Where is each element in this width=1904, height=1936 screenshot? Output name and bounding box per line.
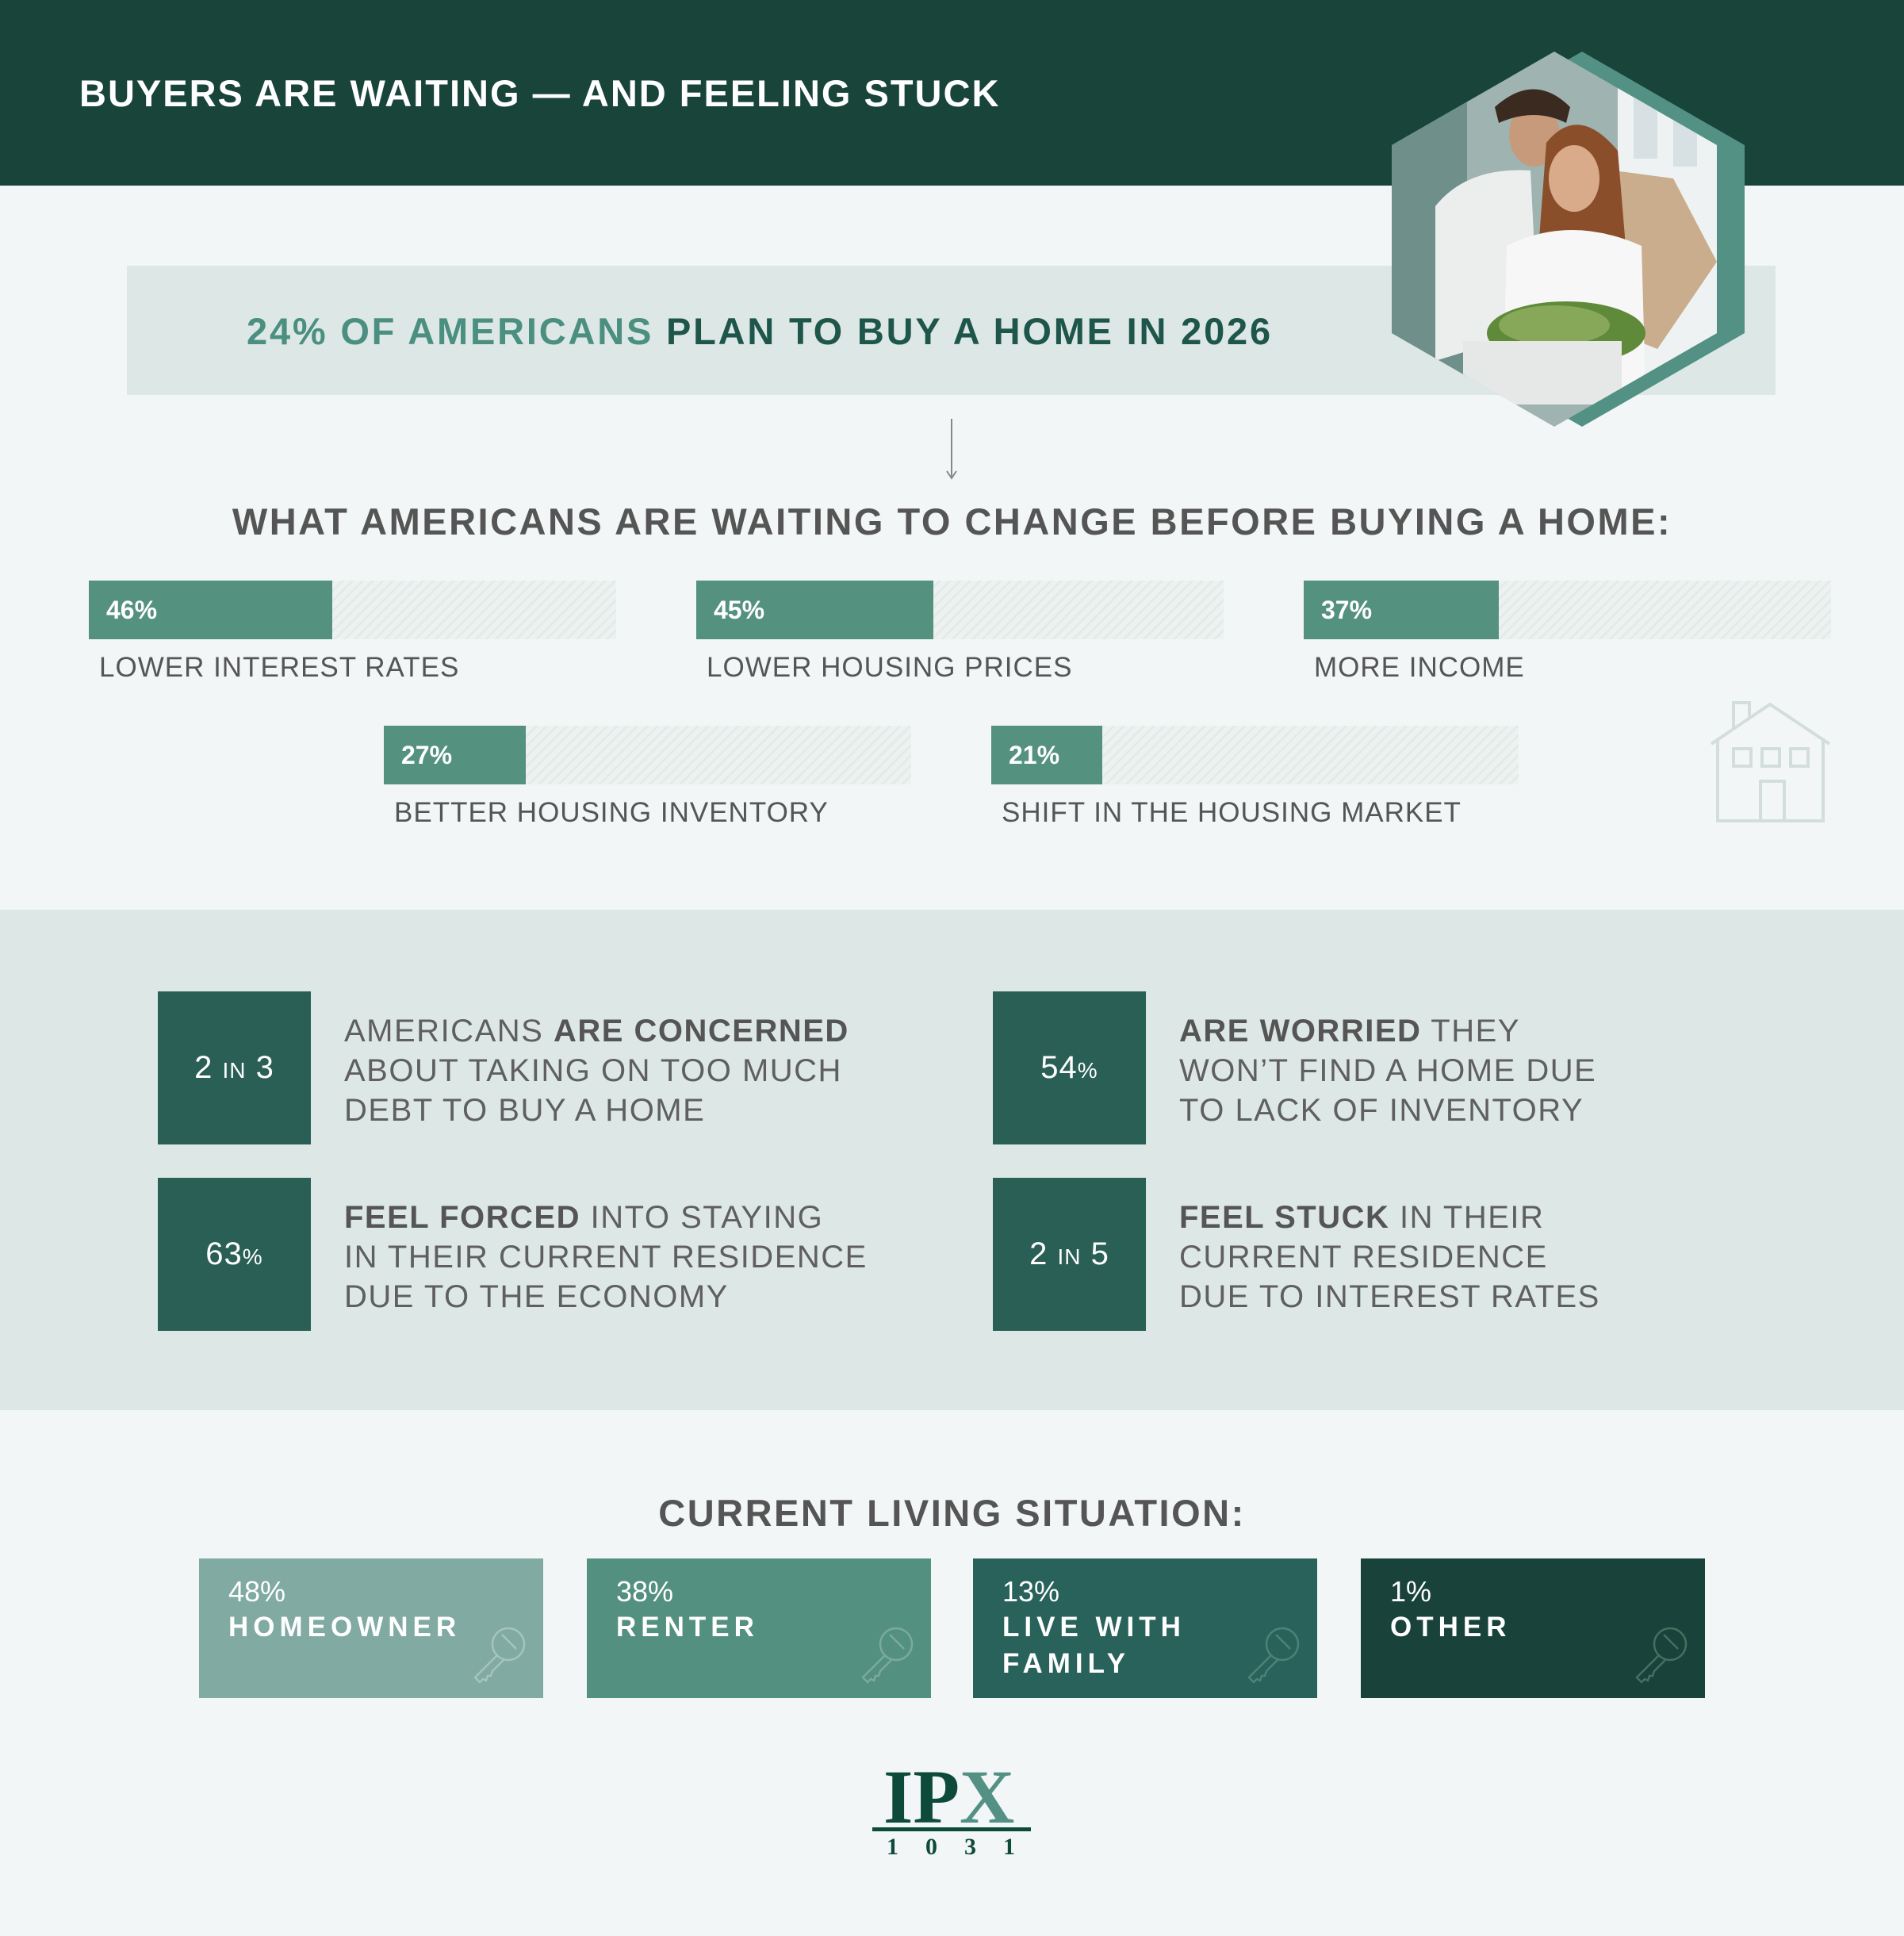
stat: 63%: DUE TO THE ECONOMY [344, 1279, 729, 1314]
stat: 2 in 5: CURRENT RESIDENCE [1179, 1240, 1548, 1275]
bar: 45% [696, 581, 1224, 639]
logo [872, 1754, 1042, 1860]
bar: 46%: 46% [106, 596, 157, 624]
card: homeowner [199, 1558, 543, 1698]
label: LOWER INTEREST RATES [99, 652, 459, 683]
card: renter: 38% [616, 1575, 673, 1608]
label: SHIFT IN THE HOUSING MARKET [1002, 797, 1462, 828]
card: other: 1% [1390, 1575, 1431, 1608]
stat: 54%: TO LACK OF INVENTORY [1179, 1093, 1584, 1128]
stat: 63% [158, 1178, 868, 1331]
heading: living situation: CURRENT LIVING SITUATION: [658, 1492, 1246, 1534]
bar: 45%: 45% [714, 596, 764, 624]
stat: 54%: 54% [1040, 1050, 1098, 1085]
card: homeowner: HOMEOWNER [228, 1612, 461, 1643]
stat: 2 in 3: AMERICANS ARE CONCERNED [344, 1014, 849, 1049]
bar: 46% [89, 581, 616, 639]
stat: 63%: 63% [205, 1236, 263, 1271]
stat: 2 in 5: FEEL STUCK IN THEIR [1179, 1200, 1544, 1235]
stat: 54%: ARE WORRIED THEY [1179, 1014, 1520, 1049]
card: live with family: FAMILY [1002, 1648, 1130, 1679]
card: live with family: 13% [1002, 1575, 1059, 1608]
bar: 27% [384, 726, 911, 784]
bar: 27%: 27% [401, 741, 452, 769]
header band [0, 0, 1904, 186]
stat: 63%: FEEL FORCED INTO STAYING [344, 1200, 823, 1235]
label: LOWER HOUSING PRICES [707, 652, 1072, 683]
stat: 2 in 3 [158, 991, 849, 1144]
card: homeowner: 48% [228, 1575, 285, 1608]
stat: 54% [993, 991, 1596, 1144]
label: MORE INCOME [1314, 652, 1525, 683]
banner text: 24% OF AMERICANS PLAN TO BUY A HOME IN 2026 [247, 310, 1273, 352]
card: live with family [973, 1558, 1317, 1698]
arrow [946, 419, 957, 480]
stat: 54%: WON’T FIND A HOME DUE [1179, 1053, 1596, 1088]
stat: 2 in 5: 2 IN 5 [1029, 1236, 1109, 1271]
card: renter [587, 1558, 931, 1698]
card: other: OTHER [1390, 1612, 1511, 1643]
panel: stats [0, 910, 1904, 1410]
bar: 37% [1304, 581, 1831, 639]
heading: waiting to change: WHAT AMERICANS ARE WAITING TO CHANGE BEFORE BUYING A HOME: [232, 500, 1672, 542]
logo: 1031 [887, 1834, 1042, 1860]
bar: 37%: 37% [1321, 596, 1372, 624]
title: BUYERS ARE WAITING — AND FEELING STUCK [79, 72, 1000, 114]
card: renter: RENTER [616, 1612, 759, 1643]
bar: 21%: 21% [1009, 741, 1059, 769]
card: live with family: LIVE WITH [1002, 1612, 1186, 1643]
banner [127, 266, 1776, 395]
stat: 2 in 5: DUE TO INTEREST RATES [1179, 1279, 1600, 1314]
stat: 2 in 5 [993, 1178, 1600, 1331]
logo: IPX [883, 1754, 1014, 1839]
stat: 63%: IN THEIR CURRENT RESIDENCE [344, 1240, 868, 1275]
stat: 2 in 3: DEBT TO BUY A HOME [344, 1093, 705, 1128]
label: BETTER HOUSING INVENTORY [394, 797, 829, 828]
stat: 2 in 3: 2 IN 3 [194, 1050, 274, 1085]
hexagon photo [1392, 52, 1745, 427]
bar: 21% [991, 726, 1519, 784]
icon: house [1711, 701, 1830, 822]
stat: 2 in 3: ABOUT TAKING ON TOO MUCH [344, 1053, 842, 1088]
card: other [1361, 1558, 1705, 1698]
